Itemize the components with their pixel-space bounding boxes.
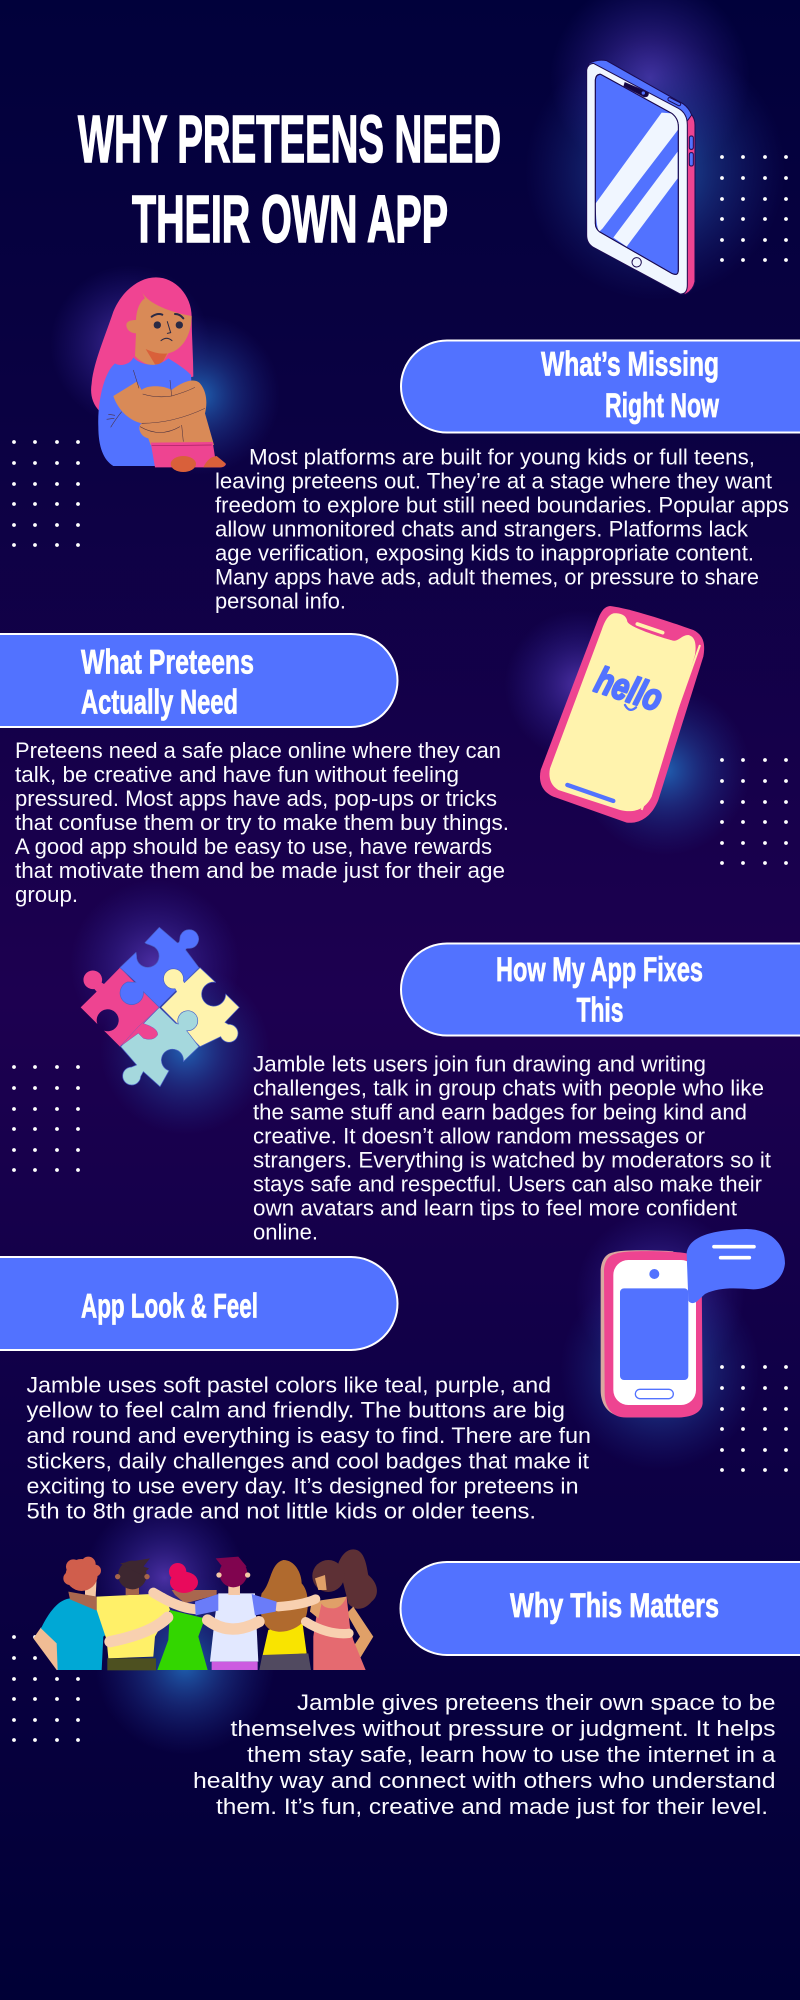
text block: app look and feel <box>26 1372 591 1524</box>
text block: what's missing: age verification, exposing kids to inappropriate content. <box>215 540 754 566</box>
dot grid: left of section one <box>12 440 80 547</box>
dot grid: left of section five <box>12 1635 80 1742</box>
text block: what preteens need: Preteens need a safe place online where they can <box>15 738 501 763</box>
text block: what's missing: Most platforms are built for young kids or full teens, <box>249 444 755 470</box>
text block: what preteens need: group. <box>15 882 78 907</box>
heading: How My App Fixes This: How My App Fixes <box>496 951 703 989</box>
text block: how my app fixes this: strangers. Everything is watched by moderators so it <box>253 1148 771 1172</box>
text: hello: hello <box>590 658 668 719</box>
text block: app look and feel: Jamble uses soft pastel colors like teal, purple, and <box>26 1372 551 1398</box>
text block: how my app fixes this: challenges, talk in group chats with people who like <box>253 1076 764 1100</box>
text block: how my app fixes this: Jamble lets users join fun drawing and writing <box>253 1052 706 1076</box>
text block: what's missing: leaving preteens out. They’re at a stage where they want <box>215 468 772 494</box>
panel: App Look & Feel <box>0 1257 398 1350</box>
icon: isometric phone <box>587 60 695 294</box>
text block: what's missing: Many apps have ads, adult themes, or pressure to share <box>215 564 759 590</box>
heading: What's Missing Right Now: What’s Missing <box>541 346 719 384</box>
dot grid: top right <box>720 155 788 262</box>
heading: What's Missing Right Now: Right Now <box>605 387 719 425</box>
text block: how my app fixes this: creative. It doesn’t allow random messages or <box>253 1124 705 1148</box>
text block: why this matters <box>193 1690 776 1819</box>
dot grid: right of section two <box>720 758 788 865</box>
text block: how my app fixes this: the same stuff and earn badges for being kind and <box>253 1100 747 1124</box>
text block: how my app fixes this <box>253 1052 771 1244</box>
panel: What's Missing Right Now <box>401 340 800 432</box>
text block: what preteens need: that confuse them or try to make them buy things. <box>15 810 509 835</box>
text block: app look and feel: exciting to use every day. It’s designed for preteens in <box>26 1474 578 1498</box>
icon: sad girl hugging knees <box>91 277 226 475</box>
dot grid: left of section three <box>12 1065 80 1172</box>
text block: app look and feel: 5th to 8th grade and not little kids or older teens. <box>26 1498 536 1524</box>
icon: hello phone <box>540 606 704 823</box>
heading: What's Missing Right Now <box>541 346 719 425</box>
title: WHY PRETEENS NEED <box>78 102 501 177</box>
text block: why this matters: themselves without pressure or judgment. It helps <box>230 1716 776 1741</box>
text block: app look and feel: and round and everything is easy to find. There are fun <box>26 1423 591 1448</box>
heading: How My App Fixes This <box>496 951 703 1030</box>
title: THEIR OWN APP <box>132 182 448 257</box>
heading: Why This Matters: Why This Matters <box>510 1587 719 1625</box>
text block: why this matters: healthy way and connect with others who understand <box>193 1768 776 1793</box>
icon: puzzle pieces <box>81 927 239 1087</box>
text block: what's missing: freedom to explore but still need boundaries. Popular apps <box>215 492 789 518</box>
icon: phone with chat bubble <box>601 1229 785 1418</box>
text block: app look and feel: yellow to feel calm and friendly. The buttons are big <box>26 1398 565 1422</box>
text block: what preteens need: pressured. Most apps have ads, pop-ups or tricks <box>15 786 497 811</box>
heading: What Preteens Actually Need <box>81 644 254 722</box>
text block: why this matters: them stay safe, learn how to use the internet in a <box>247 1742 776 1767</box>
text block: what preteens need: A good app should be easy to use, have rewards <box>15 834 492 859</box>
icon: group of friends hugging <box>33 1549 377 1670</box>
panel: What Preteens Actually Need <box>0 634 398 727</box>
text block: how my app fixes this: own avatars and learn tips to feel more confident <box>253 1196 737 1220</box>
panel: Why This Matters <box>401 1562 800 1655</box>
text block: what preteens need: talk, be creative and have fun without feeling <box>15 762 459 787</box>
heading: What Preteens Actually Need: What Preteens <box>81 644 254 682</box>
text block: why this matters: Jamble gives preteens their own space to be <box>297 1690 776 1715</box>
heading: App Look & Feel: App Look & Feel <box>81 1288 258 1326</box>
panel: How My App Fixes This <box>401 944 800 1036</box>
title <box>78 102 501 257</box>
text block: what's missing: allow unmonitored chats and strangers. Platforms lack <box>215 516 749 542</box>
text block: what's missing <box>215 444 789 614</box>
heading: What Preteens Actually Need: Actually Need <box>81 684 238 722</box>
text block: what's missing: personal info. <box>215 588 346 614</box>
text block: how my app fixes this: online. <box>253 1220 318 1244</box>
text block: app look and feel: stickers, daily challenges and cool badges that make it <box>26 1448 589 1474</box>
text block: how my app fixes this: stays safe and respectful. Users can also make their <box>253 1172 762 1196</box>
text block: what preteens need: that motivate them and be made just for their age <box>15 858 505 883</box>
dot grid: right of section four <box>720 1365 788 1472</box>
text block: what preteens need <box>15 738 509 907</box>
text block: why this matters: them. It’s fun, creative and made just for their level. <box>216 1794 768 1819</box>
heading: How My App Fixes This: This <box>576 992 624 1030</box>
